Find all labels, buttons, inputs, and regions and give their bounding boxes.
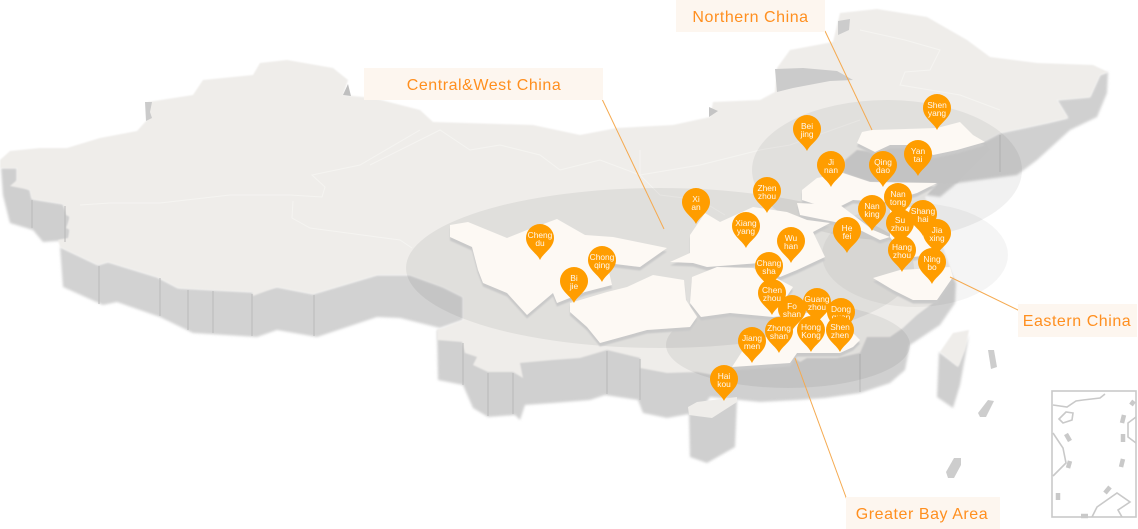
pin: Chongqing — [588, 246, 616, 282]
label: Northern China — [676, 0, 825, 32]
label: Greater Bay Area — [846, 497, 1000, 529]
pin: Chongqing: qing — [594, 260, 610, 270]
highlighted provinces — [450, 122, 985, 367]
pin: Jiangmen: men — [744, 341, 760, 351]
pin: Zhongshan: shan — [770, 331, 788, 341]
pin: Nantong: tong — [890, 197, 906, 207]
pin: Foshan — [778, 295, 806, 331]
pin: Suzhou: zhou — [891, 223, 909, 233]
pin: Shenyang: Shen — [927, 100, 947, 110]
pin: Foshan: Fo — [787, 301, 797, 311]
pin: Zhenzhou: Zhen — [757, 183, 777, 193]
pin: Changsha — [755, 252, 783, 288]
pin: Qingdao: Qing — [874, 157, 892, 167]
pin: Suzhou: Su — [895, 215, 905, 225]
province: Hunan and Jiangxi — [690, 267, 793, 317]
pin: Beijing — [793, 115, 821, 151]
pin: Wuhan: han — [784, 241, 798, 251]
leader line: Greater Bay — [795, 358, 847, 500]
pin: Wuhan — [777, 227, 805, 263]
pin: Haikou: Hai — [718, 371, 730, 381]
pin: Shenzhen: Shen — [830, 322, 850, 332]
province: Shanghai and Jiangsu coast — [890, 205, 942, 258]
pin: Yantai: Yan — [911, 146, 925, 156]
leader line: Central and West — [602, 99, 664, 229]
pin: Zhongshan: Zhong — [767, 323, 791, 333]
pin: Haikou: kou — [717, 379, 731, 389]
province: Guizhou and Guangxi — [570, 275, 697, 343]
label: Northern China: Northern China — [692, 9, 809, 26]
pin: Guangzhou — [803, 288, 831, 324]
pin: Dongguan — [827, 298, 855, 334]
pin: Chengdu — [526, 224, 554, 260]
label: Eastern China: Eastern China — [1023, 313, 1131, 330]
pin: Dongguan: Dong — [831, 304, 851, 314]
pin: Chenzhou: zhou — [763, 293, 781, 303]
leader line: Eastern — [950, 277, 1020, 311]
province: Henan and Hubei — [670, 207, 830, 277]
province: Jiangsu — [797, 203, 890, 240]
pin: Zhongshan — [765, 317, 793, 353]
pin: Xian: an — [691, 202, 701, 212]
pin: Hefei: fei — [843, 231, 852, 241]
province: Shandong — [802, 173, 937, 210]
pin: Hangzhou — [888, 236, 916, 272]
pin: Zhenzhou: zhou — [758, 191, 776, 201]
pin: Hefei — [833, 217, 861, 253]
pin: Jiaxing — [923, 219, 951, 255]
pin: Xiangyang — [732, 212, 760, 248]
pin: Bijie — [560, 267, 588, 303]
pin: Hangzhou: zhou — [893, 250, 911, 260]
pin: Jiangmen — [738, 327, 766, 363]
pin: Jinan — [817, 151, 845, 187]
pin: Yantai: tai — [914, 154, 923, 164]
pin: Xian: Xi — [692, 194, 700, 204]
pin: Shenzhen — [826, 316, 854, 352]
pin: Foshan: shan — [783, 309, 801, 319]
ellipse: greater bay region — [666, 302, 910, 388]
pin: Nanking: Nan — [864, 201, 880, 211]
pin: Guangzhou: Guang — [804, 294, 830, 304]
pin: Hangzhou: Hang — [892, 242, 912, 252]
north hook wall — [775, 68, 853, 92]
Taiwan island — [937, 330, 969, 408]
pin: Chenzhou — [758, 279, 786, 315]
map surface — [0, 9, 1108, 378]
west wall — [1, 168, 70, 242]
inset map: South China Sea — [1052, 391, 1136, 517]
Bohai sea wall — [843, 142, 990, 184]
pin: Chenzhou: Chen — [762, 285, 782, 295]
province: Liaoning — [857, 122, 985, 155]
pin: Beijing: Bei — [801, 121, 813, 131]
pin: Chongqing: Chong — [590, 252, 615, 262]
pin: Shanghai — [909, 200, 937, 236]
pin: Xiangyang: Xiang — [735, 218, 757, 228]
pin: Jiaxing: xing — [929, 233, 945, 243]
label: Central and West China: Central&West China — [407, 77, 561, 94]
pin: Hong Kong: Hong — [801, 322, 821, 332]
pin: Shanghai: hai — [917, 214, 929, 224]
ellipse: eastern region — [822, 203, 1008, 307]
pin: Yantai — [904, 140, 932, 176]
pin: Ningbo — [918, 248, 946, 284]
south wall — [437, 272, 956, 420]
notch walls — [145, 19, 853, 121]
pin: Ningbo: bo — [927, 262, 937, 272]
label: Eastern China — [1018, 304, 1137, 337]
leader line: Northern — [825, 31, 872, 130]
pin: Guangzhou: zhou — [808, 302, 826, 312]
small sea islands — [946, 350, 997, 478]
pin: Hefei: He — [842, 223, 853, 233]
province: Zhejiang — [873, 267, 953, 300]
wall strips — [32, 135, 1000, 416]
province lines — [80, 30, 1000, 248]
pin: Shenyang: yang — [928, 108, 946, 118]
pin: Xiangyang: yang — [737, 226, 755, 236]
pin: Dongguan: guan — [832, 312, 851, 322]
pin: Wuhan: Wu — [785, 233, 798, 243]
pin: Changsha: sha — [762, 266, 776, 276]
ellipse: central and west region — [406, 188, 914, 348]
pin: Bijie: jie — [569, 281, 579, 291]
ellipse: northern region — [752, 100, 1022, 240]
pin: Jinan: nan — [824, 165, 838, 175]
pin: Beijing: jing — [799, 129, 814, 139]
pin: Suzhou — [886, 209, 914, 245]
pin: Jiaxing: Jia — [932, 225, 943, 235]
pin: Nantong: Nan — [890, 189, 906, 199]
Hainan island — [688, 397, 737, 463]
pin: Hong Kong — [797, 316, 825, 352]
pin: Chengdu: Cheng — [528, 230, 553, 240]
pin: Nanking: king — [864, 209, 880, 219]
pin: Shenzhen: zhen — [831, 330, 849, 340]
pin: Changsha: Chang — [757, 258, 782, 268]
pin: Shenyang — [923, 94, 951, 130]
pin: Jiangmen: Jiang — [742, 333, 762, 343]
pin: Jinan: Ji — [828, 157, 834, 167]
label: Central and West China — [364, 68, 603, 100]
pin: Haikou — [710, 365, 738, 401]
north-east wall — [925, 72, 1108, 197]
pin: Xian — [682, 188, 710, 224]
map walls — [1, 72, 1108, 420]
province: Guangdong — [732, 305, 860, 367]
pin: Chengdu: du — [535, 238, 545, 248]
wall under western border — [60, 247, 463, 337]
label: Greater Bay Area: Greater Bay Area — [856, 506, 988, 523]
pin: Qingdao — [869, 151, 897, 187]
pin: Nanking — [858, 195, 886, 231]
pin: Shanghai: Shang — [911, 206, 935, 216]
pin: Ningbo: Ning — [923, 254, 941, 264]
pin: Nantong — [884, 183, 912, 219]
pin: Bijie: Bi — [570, 273, 578, 283]
pin: Hong Kong: Kong — [801, 330, 821, 340]
pin: Qingdao: dao — [876, 165, 890, 175]
pin: Zhenzhou — [753, 177, 781, 213]
province: Sichuan and Chongqing — [450, 219, 667, 315]
